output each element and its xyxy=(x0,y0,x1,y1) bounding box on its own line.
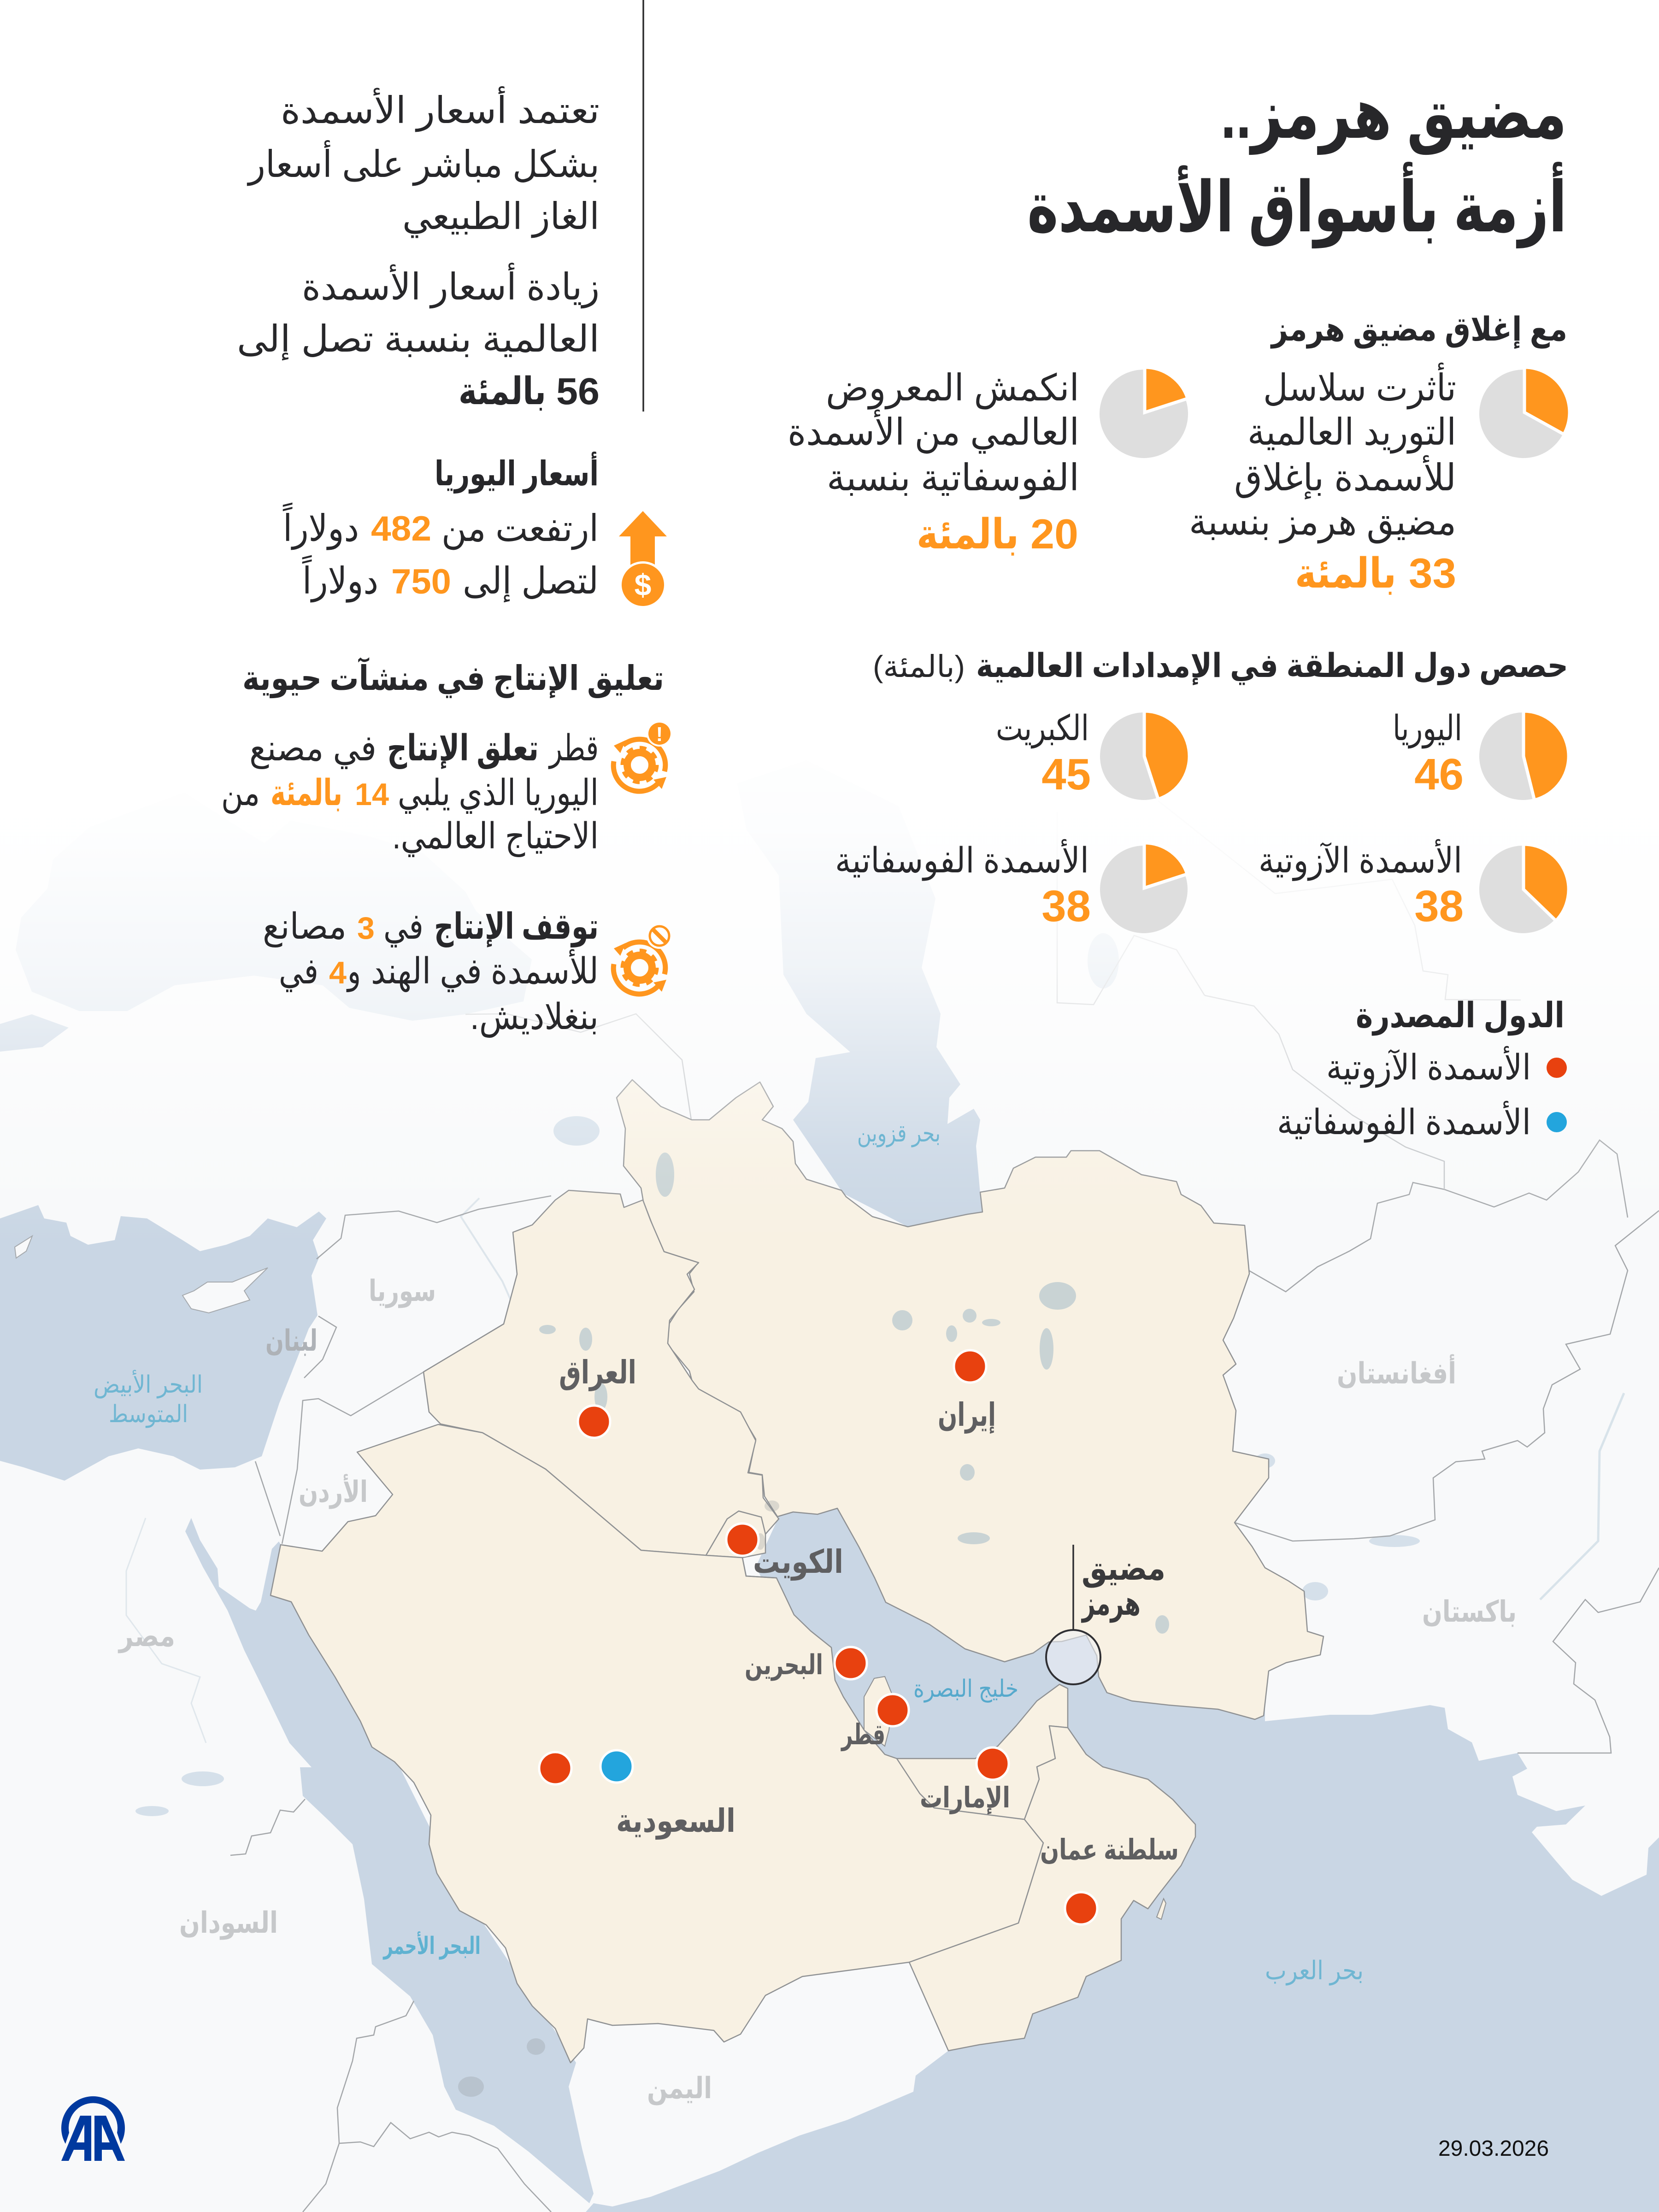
label: phosphate fertilizer: 38 xyxy=(1041,882,1091,931)
intro text: العالمية بنسبة تصل إلى xyxy=(237,318,600,361)
text: price rise: ارتفعت من xyxy=(441,508,599,550)
pie: sulfur 45 xyxy=(1100,711,1189,800)
intro text: بشكل مباشر على أسعار xyxy=(247,140,600,186)
panel: regional shares xyxy=(835,647,1569,933)
intro text: الغاز الطبيعي xyxy=(402,196,600,238)
heading: production halt: تعليق الإنتاج في منشآت حيوية xyxy=(242,657,664,699)
label: phosphate fertilizer xyxy=(835,839,1091,931)
text: plants stopped in India and Bangladesh: توقف الإنتاج xyxy=(434,906,599,948)
text: price rise: 482 xyxy=(371,509,431,548)
text: phosphate supply: انكمش المعروض xyxy=(826,367,1079,410)
text: plants stopped in India and Bangladesh: 4 xyxy=(329,955,347,990)
map labels: seas: بحر قزوين xyxy=(857,1120,941,1147)
icon: arrow up with dollar coin xyxy=(619,511,667,608)
top divider line xyxy=(642,0,644,412)
map labels: highlighted countries: الكويت xyxy=(753,1544,843,1581)
pie: 20 percent xyxy=(1100,367,1188,458)
map labels: seas: البحر الأحمر xyxy=(382,1931,481,1960)
country: UAE xyxy=(897,1684,1068,1819)
text: supply chains affected: تأثرت سلاسل xyxy=(1263,363,1456,410)
heading: regional shares: (بالمئة) xyxy=(873,649,965,683)
country: Iraq xyxy=(424,1190,779,1555)
country: Iran xyxy=(617,1080,1324,1719)
text: price rise: دولاراً xyxy=(302,554,378,603)
panel: urea prices xyxy=(282,451,667,608)
map labels: highlighted countries: البحرين xyxy=(745,1649,823,1681)
legend: exporting countries: الأسمدة الفوسفاتية xyxy=(1277,1101,1531,1143)
text: phosphate supply: بالمئة xyxy=(917,512,1019,558)
text: phosphate supply: الفوسفاتية بنسبة xyxy=(827,457,1079,500)
sea: Black Sea xyxy=(16,793,532,1021)
lakes and rivers xyxy=(126,933,1624,1816)
sea: Marmara xyxy=(0,1014,69,1052)
legend: exporting countries: الأسمدة الآزوتية xyxy=(1326,1046,1531,1088)
strait of Hormuz marker: هرمز xyxy=(1081,1585,1141,1623)
heading: urea prices: أسعار اليوريا xyxy=(435,451,599,494)
text: Qatar plant suspended: تعلق الإنتاج xyxy=(387,728,539,770)
map labels: seas: بحر العرب xyxy=(1265,1956,1364,1986)
map labels: neighbouring countries: اليمن xyxy=(647,2071,712,2106)
map labels: highlighted countries: السعودية xyxy=(616,1803,735,1840)
text: Qatar plant suspended: في مصنع xyxy=(249,728,377,769)
text: supply chains affected: مضيق هرمز بنسبة xyxy=(1189,501,1456,544)
text: price rise: 750 xyxy=(391,562,451,601)
island: Masirah xyxy=(1157,1899,1166,1919)
logo: Anadolu Agency AA xyxy=(61,2096,125,2161)
heading: with strait closure: مع إغلاق مضيق هرمز xyxy=(1270,311,1567,349)
label: sulfur: 45 xyxy=(1041,750,1091,799)
strait of Hormuz marker xyxy=(1046,1545,1165,1684)
text: Qatar plant suspended: من xyxy=(221,772,260,814)
text: phosphate supply xyxy=(788,367,1079,558)
text: Qatar plant suspended: اليوريا الذي يلبي xyxy=(398,772,599,814)
legend: exporting countries xyxy=(1277,996,1567,1143)
text: supply chains affected xyxy=(1189,363,1456,597)
text: plants stopped in India and Bangladesh: في xyxy=(279,951,318,992)
icon: gear with stop sign xyxy=(613,923,672,994)
sea: Arabian Sea, Gulf of Oman and Arabian Gulf xyxy=(586,1493,1659,2212)
map labels: seas: البحر الأبيض xyxy=(94,1370,203,1399)
production pins xyxy=(539,1350,1097,1924)
label: urea xyxy=(1393,709,1464,799)
map labels: highlighted countries: إيران xyxy=(938,1397,996,1434)
map labels: neighbouring countries xyxy=(118,1274,1517,2106)
sea: Caspian xyxy=(737,760,982,1227)
text: supply chains affected: للأسمدة بإغلاق xyxy=(1234,455,1456,500)
map labels: highlighted countries: العراق xyxy=(559,1354,636,1391)
map labels: highlighted countries: الإمارات xyxy=(920,1782,1010,1814)
map labels: neighbouring countries: السودان xyxy=(179,1906,278,1940)
text: phosphate supply: 20 xyxy=(1030,511,1078,558)
text: supply chains affected: 33 xyxy=(1409,550,1456,597)
panel: production halt xyxy=(221,657,672,1038)
label: nitrogen fertilizer: الأسمدة الآزوتية xyxy=(1259,839,1462,881)
pie: 33 percent xyxy=(1479,367,1570,458)
title xyxy=(1027,75,1567,248)
map labels: seas: المتوسط xyxy=(109,1401,188,1428)
title: مضيق هرمز.. xyxy=(1221,75,1567,155)
map labels: neighbouring countries: مصر xyxy=(118,1619,175,1653)
sea: Red Sea xyxy=(185,1518,594,2203)
intro text xyxy=(237,86,600,412)
kuwait neutral border xyxy=(742,1558,777,1578)
map labels: highlighted countries xyxy=(559,1354,1179,1866)
pie: phosphate fertilizer 38 xyxy=(1100,843,1188,933)
strait of Hormuz marker: مضيق xyxy=(1082,1550,1165,1588)
text: plants stopped in India and Bangladesh: للأسمدة في الهند xyxy=(371,949,599,992)
heading: regional shares: حصص دول المنطقة في الإمدادات العالمية xyxy=(976,647,1568,685)
map labels: highlighted countries: سلطنة عمان xyxy=(1040,1834,1179,1866)
label: urea: اليوريا xyxy=(1393,709,1462,749)
text: plants stopped in India and Bangladesh xyxy=(263,906,599,1038)
label: urea: 46 xyxy=(1414,750,1464,799)
panel: closure of the strait xyxy=(788,311,1570,597)
country: Qatar xyxy=(864,1677,893,1746)
salt lakes xyxy=(539,1153,1169,1634)
country: Kuwait xyxy=(706,1511,765,1558)
icon: gear with warning xyxy=(613,721,672,791)
country: Oman xyxy=(909,1726,1195,2051)
map labels: neighbouring countries: باكستان xyxy=(1422,1595,1517,1628)
sea: Mediterranean xyxy=(0,1205,326,1481)
icon: gear with warning: ! xyxy=(656,723,663,746)
text: Qatar plant suspended xyxy=(221,728,599,857)
intro text: 56 xyxy=(556,371,600,412)
map labels: seas: خليج البصرة xyxy=(913,1676,1018,1703)
label: phosphate fertilizer: الأسمدة الفوسفاتية xyxy=(835,839,1089,881)
intro text: زيادة أسعار الأسمدة xyxy=(302,263,600,309)
text: supply chains affected: بالمئة xyxy=(1295,551,1396,597)
text: price rise xyxy=(282,502,599,603)
text: phosphate supply: العالمي من الأسمدة xyxy=(788,409,1079,454)
faint northern borders xyxy=(465,798,1521,1189)
country: Saudi Arabia xyxy=(271,1424,1043,2063)
intro text: بالمئة xyxy=(459,371,546,412)
reefs and deltas xyxy=(458,1500,779,2097)
map labels: neighbouring countries: الأردن xyxy=(299,1474,368,1509)
map labels: highlighted countries: قطر xyxy=(841,1719,885,1751)
map labels: seas xyxy=(94,1120,1364,1986)
text: Qatar plant suspended: قطر xyxy=(548,728,599,770)
pie: urea 46 xyxy=(1479,711,1569,800)
intro text: تعتمد أسعار الأسمدة xyxy=(281,86,600,132)
map labels: neighbouring countries: سوريا xyxy=(369,1274,436,1308)
text: plants stopped in India and Bangladesh: مصانع xyxy=(263,906,347,947)
text: Qatar plant suspended: بالمئة xyxy=(271,772,342,813)
label: nitrogen fertilizer xyxy=(1259,839,1464,931)
island: Cyprus xyxy=(182,1268,268,1313)
pie: nitrogen fertilizer 38 xyxy=(1479,844,1569,933)
text: Qatar plant suspended: الاحتياج العالمي. xyxy=(392,816,599,857)
text: Qatar plant suspended: 14 xyxy=(355,777,389,812)
date: 29.03.2026 xyxy=(1438,2136,1549,2161)
icon: arrow up with dollar coin: $ xyxy=(635,568,651,602)
map labels: neighbouring countries: أفغانستان xyxy=(1337,1354,1456,1390)
neighbouring borders xyxy=(230,1140,1659,2212)
text: price rise: دولاراً xyxy=(282,502,359,550)
legend: exporting countries: الدول المصدرة xyxy=(1356,996,1565,1036)
text: supply chains affected: التوريد العالمية xyxy=(1247,412,1456,454)
text: plants stopped in India and Bangladesh: في xyxy=(383,906,424,947)
text: plants stopped in India and Bangladesh: 3 xyxy=(357,911,375,946)
text: price rise: لتصل إلى xyxy=(463,560,599,603)
island: Crete xyxy=(15,1236,32,1258)
white fade over the top of the map xyxy=(0,691,1659,1244)
label: sulfur xyxy=(996,709,1091,799)
label: nitrogen fertilizer: 38 xyxy=(1414,882,1464,931)
text: plants stopped in India and Bangladesh: بنغلاديش. xyxy=(470,996,599,1038)
map labels: neighbouring countries: لبنان xyxy=(265,1324,318,1357)
text: plants stopped in India and Bangladesh: و xyxy=(346,951,361,993)
label: sulfur: الكبريت xyxy=(996,709,1089,749)
